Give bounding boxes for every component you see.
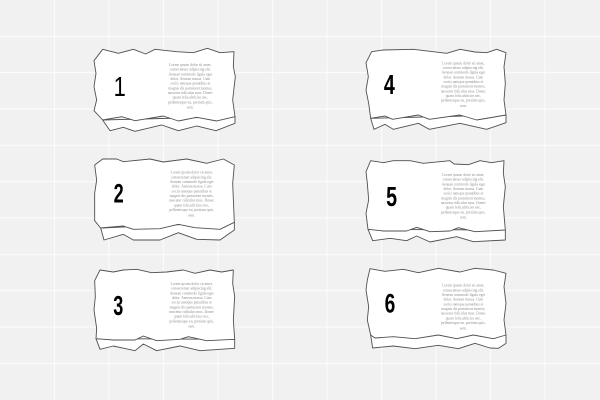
body text 3: pellentesque eu, pretium quis, bbox=[169, 319, 214, 324]
body text 6: magnis dis parturient montes, bbox=[441, 307, 485, 312]
body text 4: magnis dis parturient montes, bbox=[441, 85, 485, 90]
body text 4: consectetuer adipiscing elit. bbox=[443, 66, 484, 70]
body text 3 bbox=[169, 282, 215, 329]
body text 2: nascetur ridiculus mus. Donec bbox=[169, 199, 215, 203]
body text 3: sociis natoque penatibus et bbox=[172, 301, 213, 305]
body text 2: Aenean commodo ligula eget bbox=[170, 180, 214, 184]
body text 1: nascetur ridiculus mus. Donec bbox=[168, 91, 213, 95]
body text 1: Lorem ipsum dolor sit amet, bbox=[169, 63, 212, 68]
body text 5 bbox=[441, 173, 486, 220]
body text 3: dolor. Aenean massa. Cum bbox=[172, 296, 212, 300]
body text 1: dolor. Aenean massa. Cum bbox=[170, 77, 210, 81]
number 3: 3 bbox=[113, 290, 123, 321]
card 4 bbox=[366, 49, 506, 129]
body text 4: Aenean commodo ligula eget bbox=[441, 71, 486, 75]
body text 2: pellentesque eu, pretium quis, bbox=[169, 208, 214, 213]
body text 4 bbox=[441, 61, 486, 108]
body text 5: magnis dis parturient montes, bbox=[441, 196, 485, 201]
card 3 bbox=[94, 269, 235, 351]
body text 6: Lorem ipsum dolor sit amet, bbox=[442, 284, 485, 289]
body text 4: sem. bbox=[460, 104, 467, 108]
body text 5: pellentesque eu, pretium quis, bbox=[441, 210, 486, 215]
number 1: 1 bbox=[114, 73, 126, 103]
body text 1: consectetuer adipiscing elit. bbox=[170, 68, 211, 72]
body text 4: sociis natoque penatibus et bbox=[443, 80, 484, 84]
body text 5: quam felis,ultricies nec, bbox=[446, 206, 481, 211]
body text 3: Lorem ipsum dolor sit amet, bbox=[171, 282, 213, 287]
body text 6 bbox=[441, 284, 486, 330]
body text 3: Aenean commodo ligula eget bbox=[170, 291, 214, 295]
body text 3: sem. bbox=[188, 325, 195, 329]
body text 4: quam felis,ultricies nec, bbox=[446, 94, 481, 99]
body text 6: quam felis,ultricies nec, bbox=[446, 316, 481, 321]
body text 6: sociis natoque penatibus et bbox=[443, 302, 484, 306]
body text 6: pellentesque eu, pretium quis, bbox=[441, 321, 486, 326]
body text 1: pellentesque eu, pretium quis, bbox=[168, 100, 213, 105]
body text 3: consectetuer adipiscing elit. bbox=[171, 287, 212, 291]
body text 1: magnis dis parturient montes, bbox=[168, 86, 212, 91]
body text 1: sem. bbox=[187, 106, 194, 110]
body text 4: nascetur ridiculus mus. Donec bbox=[441, 89, 486, 93]
body text 1 bbox=[168, 63, 213, 110]
body text 3: quam felis,ultricies nec, bbox=[174, 315, 209, 320]
body text 5: sem. bbox=[460, 216, 467, 220]
body text 4: Lorem ipsum dolor sit amet, bbox=[442, 61, 485, 66]
body text 5: nascetur ridiculus mus. Donec bbox=[441, 201, 486, 205]
body text 6: dolor. Aenean massa. Cum bbox=[443, 298, 483, 302]
body text 2: sociis natoque penatibus et bbox=[172, 189, 213, 193]
body text 6: Aenean commodo ligula eget bbox=[441, 293, 486, 297]
body text 5: sociis natoque penatibus et bbox=[443, 192, 484, 196]
body text 5: Aenean commodo ligula eget bbox=[441, 182, 486, 186]
body text 2: Lorem ipsum dolor sit amet, bbox=[171, 171, 213, 176]
body text 4: pellentesque eu, pretium quis, bbox=[441, 99, 486, 104]
number 5: 5 bbox=[386, 182, 397, 213]
body text 2 bbox=[169, 171, 215, 217]
body text 1: sociis natoque penatibus et bbox=[170, 82, 211, 86]
card 2 bbox=[95, 159, 234, 240]
body text 2: quam felis,ultricies nec, bbox=[174, 203, 209, 208]
body text 1: quam felis,ultricies nec, bbox=[173, 96, 208, 101]
body text 2: magnis dis parturient montes, bbox=[170, 194, 214, 199]
body text 5: Lorem ipsum dolor sit amet, bbox=[442, 173, 485, 178]
body text 4: dolor. Aenean massa. Cum bbox=[443, 75, 483, 79]
card 6 bbox=[366, 268, 506, 349]
number 2: 2 bbox=[114, 178, 124, 209]
body text 2: sem. bbox=[188, 213, 195, 217]
body text 5: consectetuer adipiscing elit. bbox=[443, 178, 484, 182]
body text 6: consectetuer adipiscing elit. bbox=[443, 288, 484, 292]
number 4: 4 bbox=[384, 70, 395, 101]
card 1 bbox=[94, 48, 235, 131]
number 6: 6 bbox=[385, 289, 395, 318]
body text 3: magnis dis parturient montes, bbox=[170, 305, 214, 310]
body text 6: nascetur ridiculus mus. Donec bbox=[441, 312, 486, 316]
body text 6: sem. bbox=[460, 326, 467, 330]
body text 5: dolor. Aenean massa. Cum bbox=[443, 187, 483, 191]
body text 1: Aenean commodo ligula eget bbox=[168, 72, 213, 76]
card 5 bbox=[366, 161, 505, 242]
body text 2: dolor. Aenean massa. Cum bbox=[172, 185, 212, 189]
body text 2: consectetuer adipiscing elit. bbox=[171, 175, 212, 179]
body text 3: nascetur ridiculus mus. Donec bbox=[169, 310, 215, 314]
